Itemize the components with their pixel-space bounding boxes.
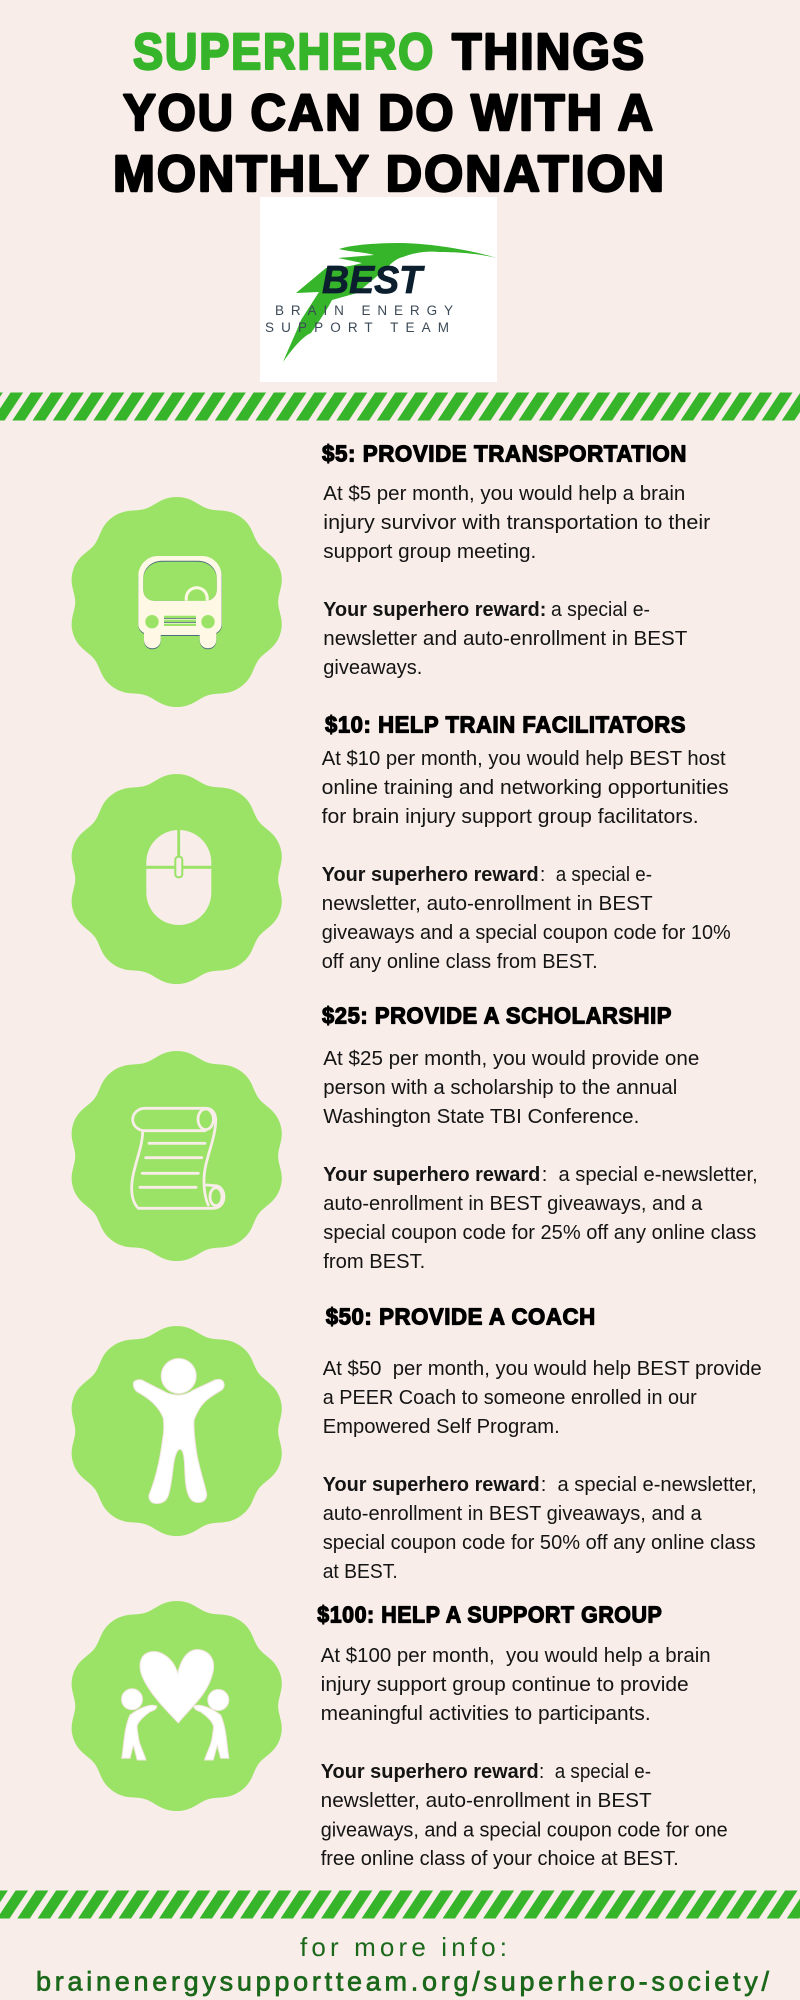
text block: $10 description: off any online class from BEST. (322, 950, 598, 973)
panel: $10 help train facilitators (72, 712, 731, 984)
text block: $100 description: free online class of your choice at BEST. (321, 1847, 679, 1870)
text block: $50 description: auto-enrollment in BEST giveaways, and a (323, 1502, 702, 1525)
text block: $5 description: injury survivor with transportation to their (323, 511, 710, 534)
text block: $100 description: At $100 per month, you would help a brain (321, 1644, 711, 1667)
text block: $10 description: giveaways and a special coupon code for 10% (322, 921, 731, 944)
footer: for more info (36, 1932, 769, 1996)
heading: $50 provide a coach: $50: PROVIDE A COACH (326, 1304, 596, 1330)
badge: $100 (72, 1601, 282, 1811)
text block: $25 description: : a special e-newsletter, (542, 1163, 758, 1186)
bottom striped divider (0, 1890, 800, 1918)
top striped divider (0, 392, 800, 420)
title: YOU CAN DO WITH A (123, 84, 655, 141)
text block: $25 description: from BEST. (323, 1250, 425, 1273)
text block: $25 description: person with a scholarship to the annual (323, 1076, 677, 1099)
heading: $5 provide transportation: $5: PROVIDE TRANSPORTATION (322, 440, 687, 466)
text block: $100 description: meaningful activities to participants. (321, 1702, 651, 1725)
text block: $25 description (323, 1047, 758, 1273)
text block: $10 description: : a special e- (540, 863, 652, 886)
text block: $25 description: special coupon code for 25% off any online class (323, 1221, 756, 1244)
icon: person with raised arms (133, 1358, 224, 1504)
text block: $5 description: Your superhero reward: (323, 598, 546, 621)
heading: $25 provide a scholarship: $25: PROVIDE A SCHOLARSHIP (322, 1002, 672, 1028)
panel: $5 provide transportation (72, 440, 710, 707)
badge: $10 (72, 774, 282, 984)
icon: computer mouse (146, 829, 212, 925)
footer: for more info: brainenergysupportteam.org/superhero-society/ (36, 1966, 769, 1996)
panel: $50 provide a coach (72, 1304, 762, 1583)
logo: BEST Brain Energy Support Team (260, 197, 497, 382)
text block: $5 description: At $5 per month, you would help a brain (323, 482, 685, 505)
text block: $10 description: Your superhero reward (322, 863, 539, 886)
text block: $5 description: a special e- (551, 598, 650, 621)
text block: $5 description: support group meeting. (323, 540, 536, 563)
text block: $100 description: newsletter, auto-enrollment in BEST (321, 1789, 652, 1812)
text block: $50 description (323, 1357, 762, 1583)
badge: $50 (72, 1326, 282, 1536)
text block: $100 description: injury support group continue to provide (321, 1673, 689, 1696)
logo: BEST Brain Energy Support Team: BRAIN ENERGY (275, 303, 453, 318)
text block: $50 description: at BEST. (323, 1560, 398, 1583)
text block: $10 description: online training and networking opportunities (322, 776, 729, 799)
text block: $5 description: giveaways. (323, 656, 422, 679)
text block: $5 description (323, 482, 710, 679)
text block: $25 description: Washington State TBI Conference. (323, 1105, 639, 1128)
title (113, 23, 666, 202)
text block: $50 description: a PEER Coach to someone enrolled in our (323, 1386, 697, 1409)
text block: $5 description: newsletter and auto-enrollment in BEST (323, 627, 688, 650)
text block: $50 description: At $50 per month, you would help BEST provide (323, 1357, 762, 1380)
text block: $50 description: Empowered Self Program. (323, 1415, 560, 1438)
icon: two people holding a heart (122, 1650, 229, 1760)
heading: $100 help a support group: $100: HELP A SUPPORT GROUP (317, 1602, 662, 1628)
text block: $10 description: At $10 per month, you would help BEST host (322, 747, 726, 770)
badge: $5 (72, 497, 282, 707)
logo: BEST Brain Energy Support Team: SUPPORT TEAM (265, 320, 449, 335)
icon: bus (138, 556, 222, 649)
title: MONTHLY DONATION (113, 145, 666, 202)
text block: $50 description: : a special e-newsletter, (541, 1473, 757, 1496)
text block: $100 description: : a special e- (539, 1760, 651, 1783)
panel: $100 help a support group (72, 1601, 728, 1870)
text block: $10 description: for brain injury support group facilitators. (322, 805, 699, 828)
text block: $100 description (321, 1644, 728, 1870)
title: THINGS (452, 23, 646, 80)
text block: $25 description: auto-enrollment in BEST giveaways, and a (323, 1192, 703, 1215)
text block: $25 description: At $25 per month, you would provide one (323, 1047, 699, 1070)
text block: $50 description: Your superhero reward (323, 1473, 540, 1496)
heading: $10 help train facilitators: $10: HELP TRAIN FACILITATORS (325, 712, 686, 738)
text block: $100 description: Your superhero reward (321, 1760, 539, 1783)
text block: $100 description: giveaways, and a special coupon code for one (321, 1818, 728, 1842)
badge: $25 (72, 1051, 282, 1261)
text block: $25 description: Your superhero reward (323, 1163, 540, 1186)
icon: scroll (132, 1108, 224, 1208)
panel: $25 provide a scholarship (72, 1002, 758, 1273)
text block: $10 description: newsletter, auto-enrollment in BEST (322, 892, 653, 915)
footer: for more info: for more info: (300, 1932, 507, 1962)
text block: $10 description (322, 747, 731, 973)
title: SUPERHERO (133, 23, 435, 80)
text block: $50 description: special coupon code for 50% off any online class (323, 1531, 756, 1554)
logo: BEST Brain Energy Support Team: BEST (322, 259, 425, 302)
